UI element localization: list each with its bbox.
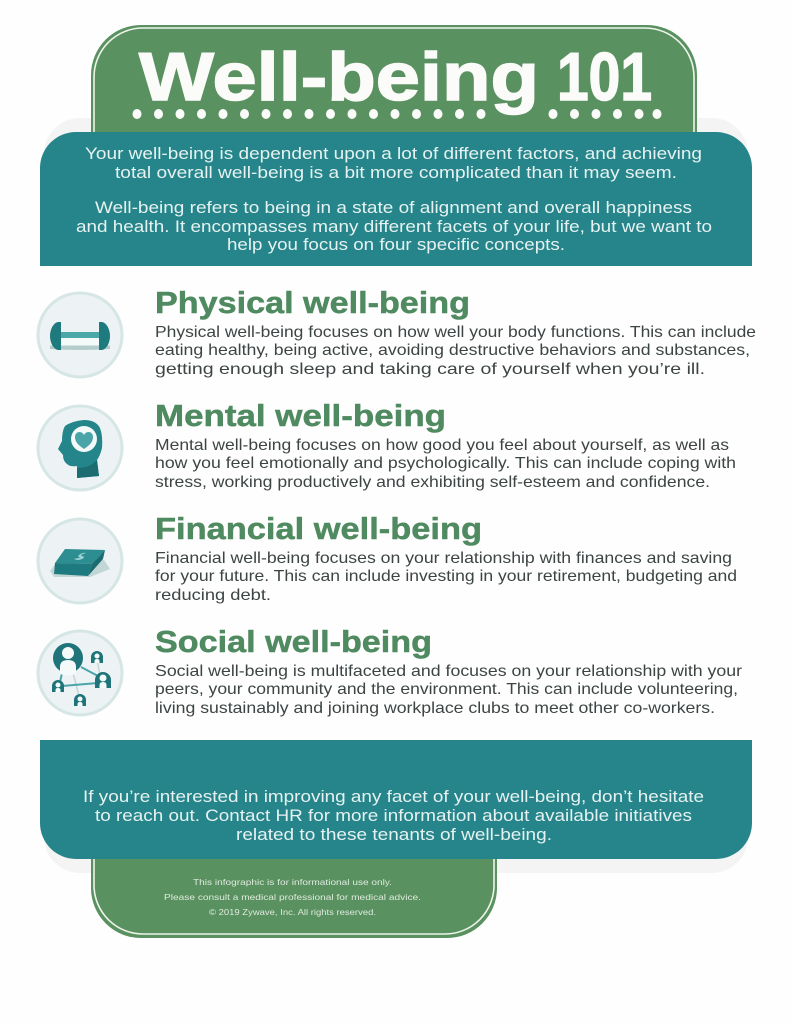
text: social description: peers, your community and the environment. This can include volunteering, [155, 681, 738, 698]
title: 101 [557, 39, 652, 115]
text: financial description: reducing debt. [155, 587, 271, 604]
disclaimer text: Please consult a medical professional for medical advice. [164, 892, 421, 902]
text: physical description [155, 324, 756, 378]
disclaimer text [164, 877, 421, 917]
intro paragraph two: Well-being refers to being in a state of alignment and overall happiness [95, 199, 692, 217]
heading: social: Social well-being [155, 624, 432, 659]
text: physical description: getting enough sleep and taking care of yourself when you’re ill. [155, 361, 705, 378]
panel: call to action [40, 740, 752, 859]
intro paragraph one: total overall well-being is a bit more complicated than it may seem. [115, 164, 677, 182]
title [139, 39, 652, 115]
dotted underline [132, 109, 662, 119]
icon: head with heart [38, 406, 122, 490]
heading: mental: Mental well-being [155, 398, 446, 433]
text: financial description: for your future. This can include investing in your retirement, budgeting and [155, 568, 737, 585]
call to action text [83, 788, 704, 844]
text: mental description: stress, working productively and exhibiting self-esteem and confidence. [155, 474, 710, 491]
intro paragraph one [85, 145, 702, 182]
heading: physical: Physical well-being [155, 285, 470, 320]
text: social description: Social well-being is multifaceted and focuses on your relationship with your [155, 663, 743, 680]
text: mental description: Mental well-being focuses on how good you feel about yourself, as well as [155, 437, 729, 454]
intro paragraph one: Your well-being is dependent upon a lot of different factors, and achieving [85, 145, 702, 163]
icon: stack of money [38, 519, 122, 603]
icon: dumbbell [38, 293, 122, 377]
icon: social network [38, 631, 122, 715]
disclaimer text: This infographic is for informational use only. [193, 877, 392, 887]
panel: title banner [91, 25, 697, 140]
text: physical description: Physical well-being focuses on how well your body functions. This can include [155, 324, 756, 341]
panel: introduction [40, 132, 752, 266]
heading: financial: Financial well-being [155, 511, 482, 546]
intro paragraph two: and health. It encompasses many different facets of your life, but we want to [76, 218, 712, 236]
text: financial description [155, 550, 737, 604]
intro paragraph two [76, 199, 712, 254]
text: financial description: Financial well-being focuses on your relationship with finances and saving [155, 550, 732, 567]
text: mental description [155, 437, 736, 491]
panel: footer disclaimer [91, 850, 497, 938]
call to action text: If you’re interested in improving any facet of your well-being, don’t hesitate [83, 788, 704, 806]
call to action text: to reach out. Contact HR for more information about available initiatives [95, 807, 692, 825]
disclaimer text: © 2019 Zywave, Inc. All rights reserved. [209, 907, 376, 917]
text: mental description: how you feel emotionally and psychologically. This can include coping with [155, 455, 736, 472]
text: physical description: eating healthy, being active, avoiding destructive behaviors and substances, [155, 342, 750, 359]
intro paragraph two: help you focus on four specific concepts. [227, 236, 565, 254]
title: Well-being [139, 39, 539, 115]
text: social description [155, 663, 743, 717]
call to action text: related to these tenants of well-being. [236, 826, 552, 844]
text: social description: living sustainably and joining workplace clubs to meet other co-workers. [155, 700, 715, 717]
